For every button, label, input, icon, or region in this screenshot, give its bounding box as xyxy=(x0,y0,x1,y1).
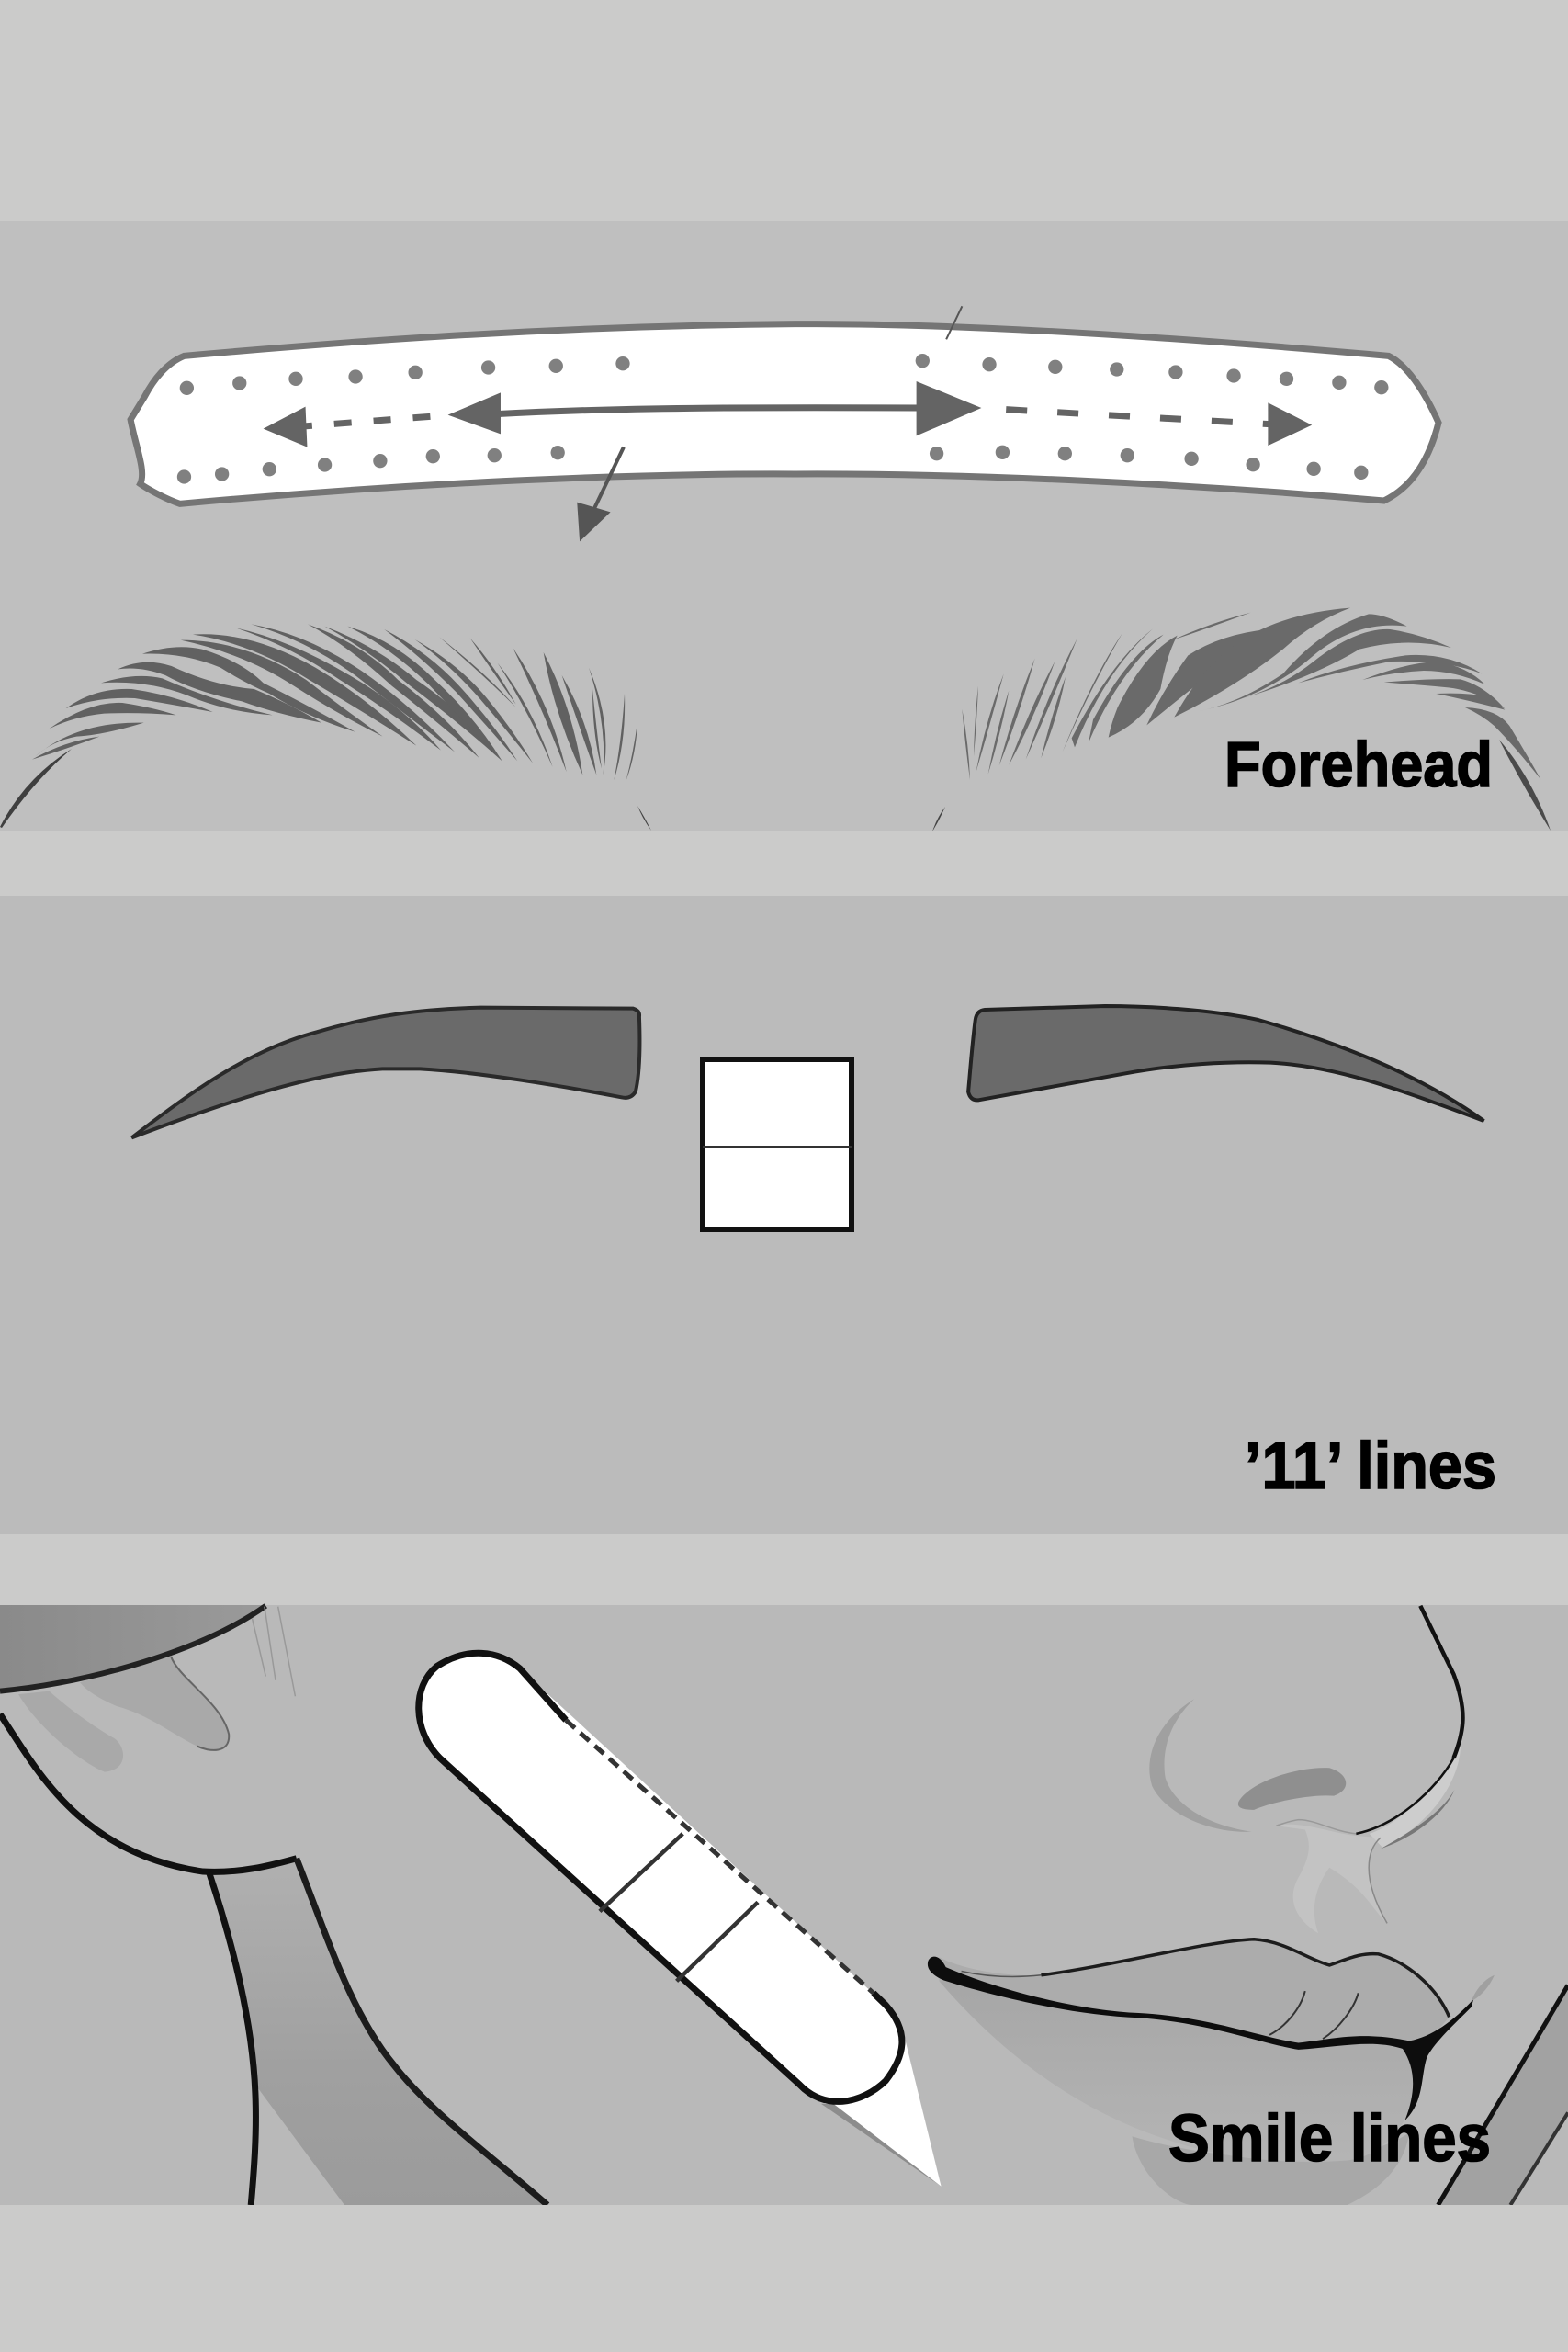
cheek shading xyxy=(18,1691,123,1772)
alar crescent xyxy=(1149,1699,1252,1832)
fine hair strokes xyxy=(253,1607,295,1696)
ear shading xyxy=(80,1657,229,1750)
right temple line xyxy=(1499,740,1551,831)
nose lower line xyxy=(1356,1758,1454,1834)
capsule patch fill xyxy=(419,1653,902,2101)
capsule divider right xyxy=(677,1902,758,1981)
neck right line xyxy=(297,1859,547,2205)
capsule divider left xyxy=(600,1834,682,1911)
tick mark xyxy=(946,306,962,339)
perforation dots xyxy=(177,354,1388,484)
lip parting line xyxy=(928,1957,1473,2120)
collar band fill xyxy=(1438,1985,1568,2205)
right eyebrow hairs xyxy=(962,608,1540,780)
face left: jaw, neck and patch xyxy=(0,1605,942,2205)
divider band 2 xyxy=(0,1534,1568,1605)
arrow: dashed right xyxy=(1006,402,1312,446)
hair edge line xyxy=(0,1606,265,1691)
philtrum highlight xyxy=(1276,1825,1387,1933)
nostril xyxy=(1238,1768,1346,1810)
chin shading xyxy=(1132,2132,1409,2205)
capsule solid outline xyxy=(419,1653,902,2101)
patch blade tip xyxy=(824,2031,942,2187)
nose fold shadow xyxy=(1381,1790,1454,1849)
upper lip outline xyxy=(1041,1939,1450,2017)
nose outline xyxy=(1420,1606,1462,1758)
label: '11' lines: ’11’ lines xyxy=(1245,1430,1496,1503)
nose fold highlight xyxy=(1370,1742,1461,1848)
divider band 1 xyxy=(0,831,1568,896)
bottom band xyxy=(0,2205,1568,2352)
face right: nose and lips xyxy=(928,1606,1568,2205)
upper lip outline taper xyxy=(962,1971,1041,1976)
nose base thin line xyxy=(1276,1820,1356,1834)
patch strip xyxy=(130,324,1438,503)
upper lip xyxy=(939,1939,1450,2047)
arrow: solid double-headed xyxy=(448,381,981,435)
square patch xyxy=(703,1059,852,1229)
forehead patch with arrows xyxy=(130,306,1438,541)
blade shadow xyxy=(821,2104,942,2187)
ear edge line xyxy=(171,1657,229,1750)
panel: forehead xyxy=(0,221,1568,831)
capsule dashed edge xyxy=(566,1720,874,1993)
dark hair mass xyxy=(0,1605,265,1691)
lip crease lines xyxy=(1269,1991,1359,2039)
lower lip xyxy=(939,1981,1420,2162)
inner left nose line xyxy=(637,806,651,831)
arrow: downward pointer xyxy=(577,447,624,541)
label: Forehead: Forehead xyxy=(1224,729,1493,800)
right brow shape xyxy=(968,1006,1483,1121)
lip corner smear xyxy=(1472,1975,1495,2001)
collar line left xyxy=(1438,1985,1568,2205)
neck left line xyxy=(209,1872,255,2205)
label: Smile lines: Smile lines xyxy=(1168,2102,1491,2176)
left temple line xyxy=(0,749,72,828)
top band xyxy=(0,0,1568,221)
jaw line xyxy=(0,1714,297,1871)
arrow: dashed left xyxy=(264,407,430,447)
left eyebrow hairs xyxy=(32,624,637,780)
left brow shape xyxy=(131,1008,639,1137)
panel: smile lines xyxy=(0,1605,1568,2205)
panel: '11' lines xyxy=(0,896,1568,1534)
philtrum edge xyxy=(1369,1838,1387,1923)
inner right nose line xyxy=(932,807,945,831)
collar line right xyxy=(1510,2112,1568,2205)
neck shading xyxy=(212,1861,547,2205)
